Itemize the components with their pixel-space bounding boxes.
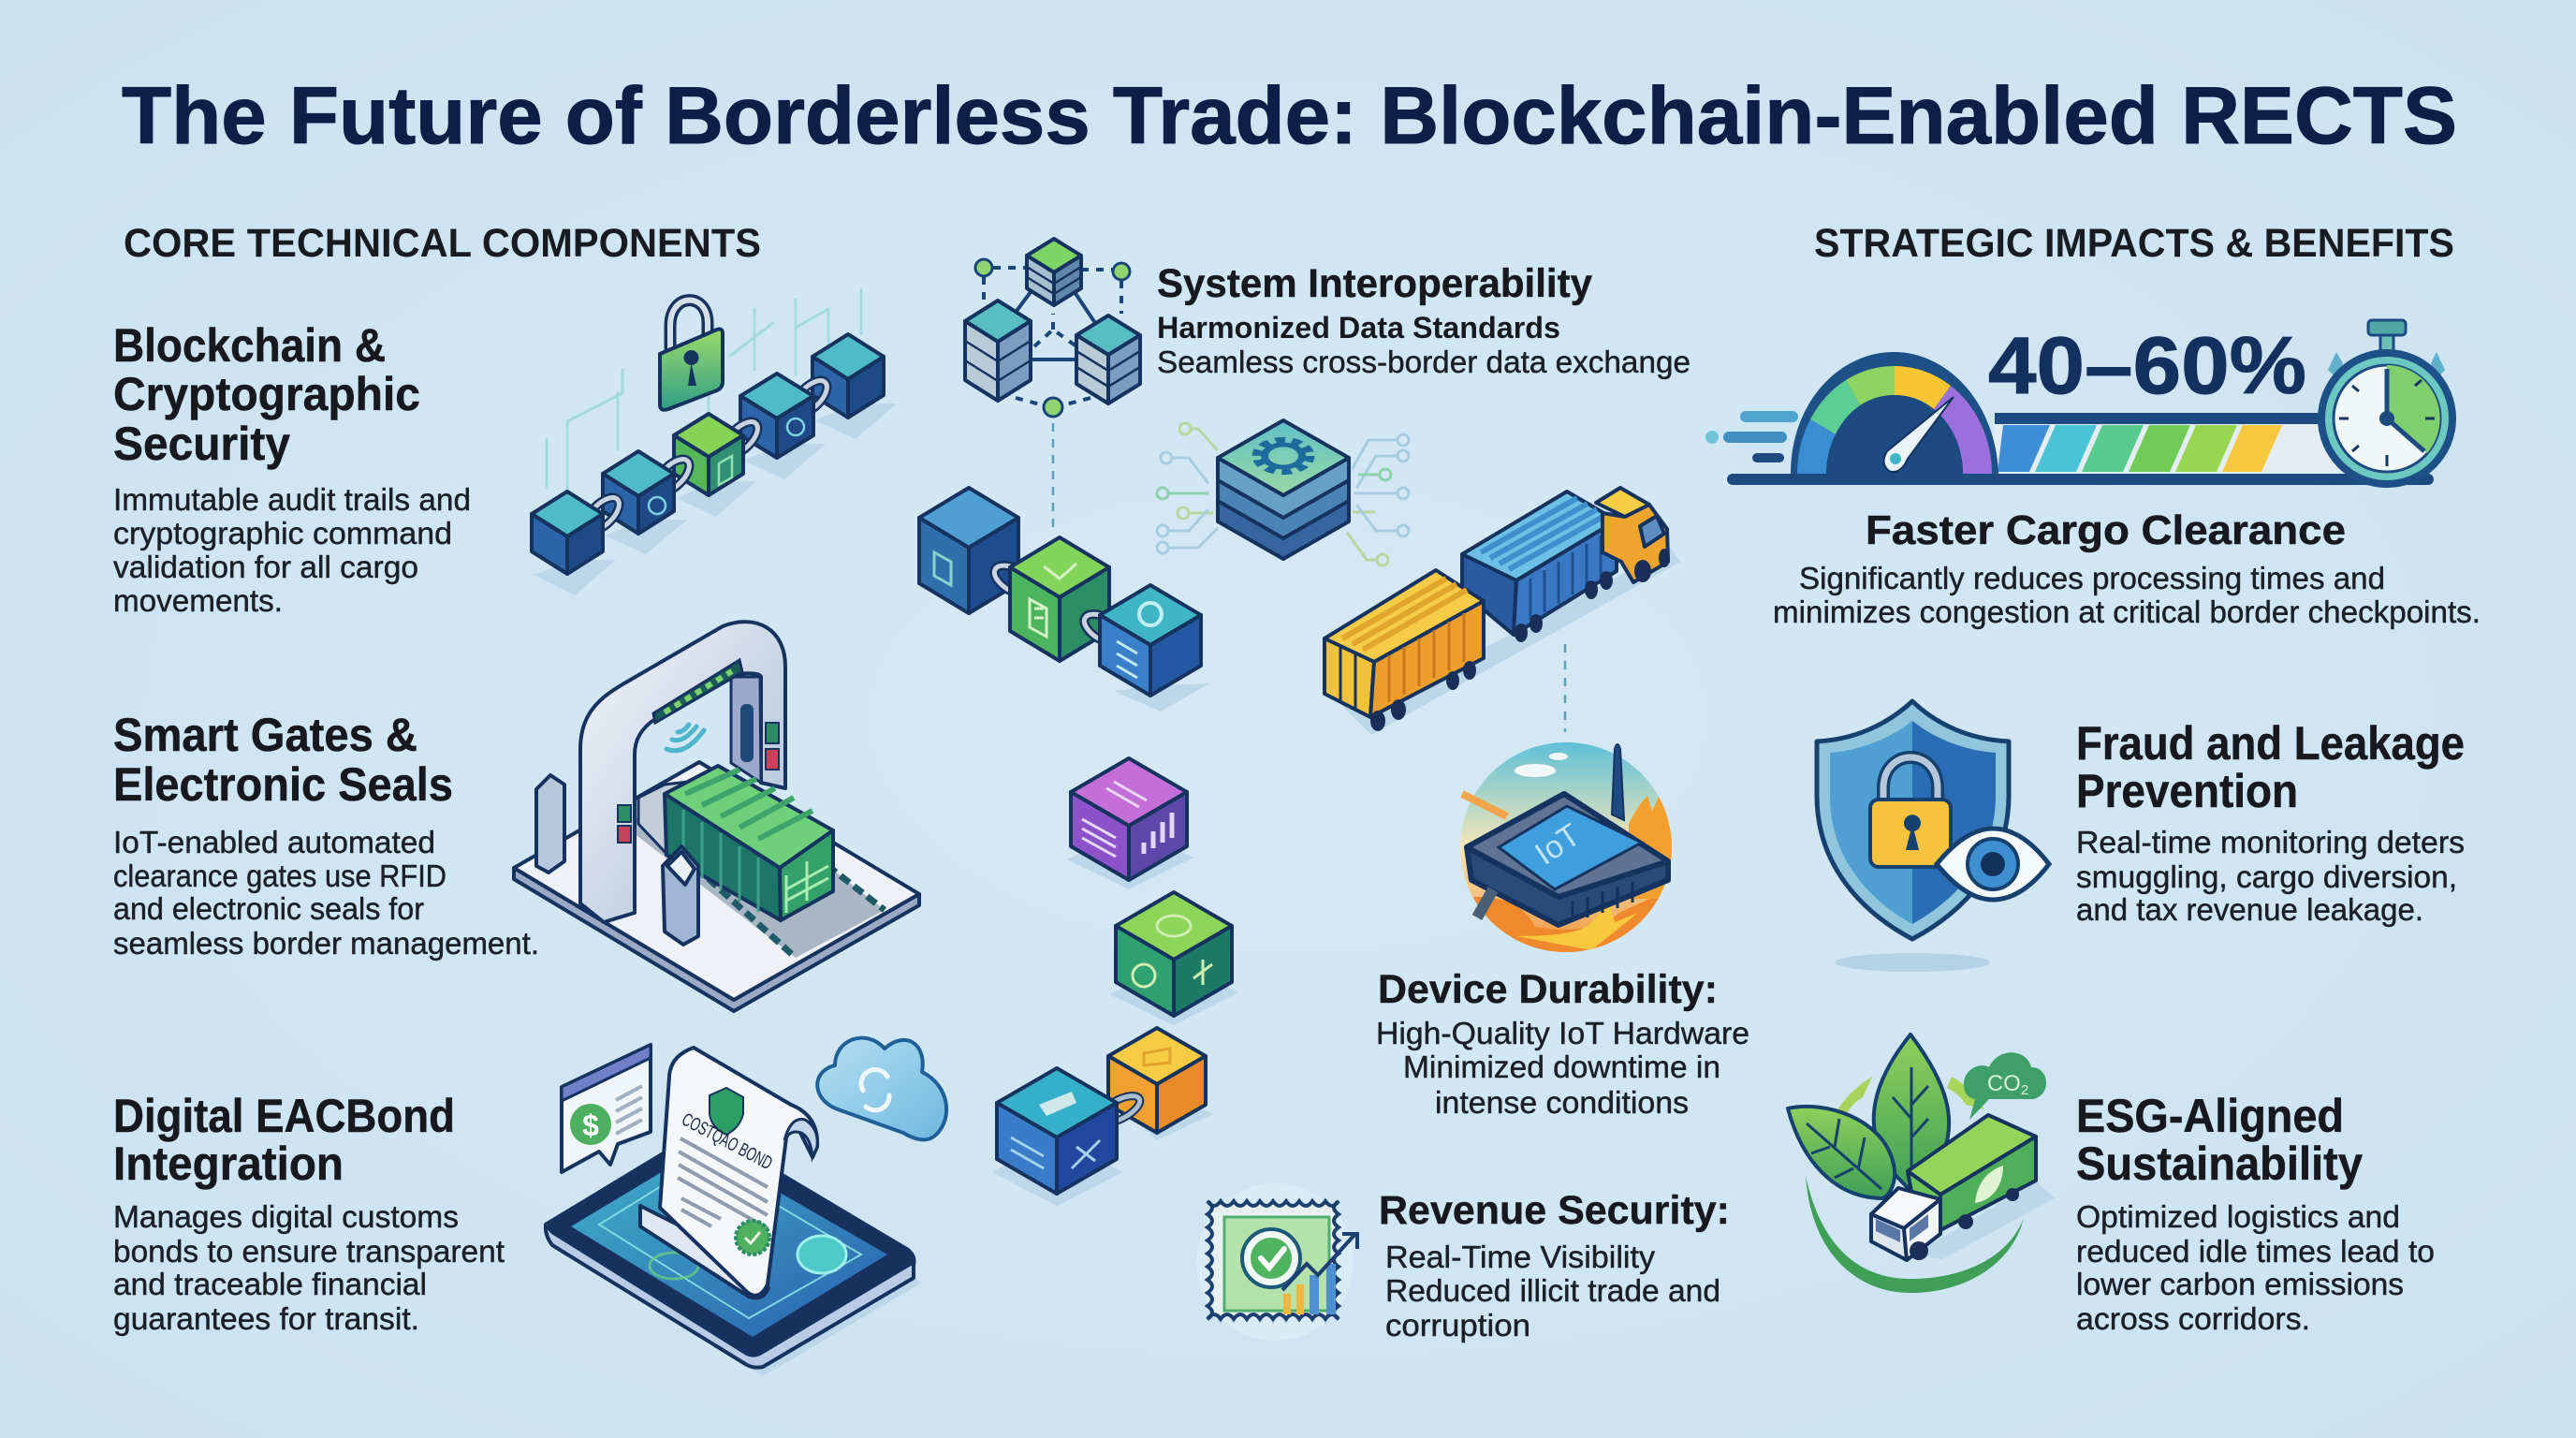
kiosk (663, 846, 698, 945)
icon: container trucks (1325, 488, 1680, 735)
body (1376, 1016, 1749, 1120)
body: blockchain (113, 482, 471, 618)
body: High-Quality IoT Hardware (1376, 1016, 1749, 1050)
text: system interoperability: Harmonized Data Standards (1157, 311, 1560, 345)
heading: blockchain (113, 319, 420, 470)
cube B (1010, 537, 1109, 661)
body: clearance gates use RFID (113, 858, 446, 893)
panel: digital eacbond text (113, 1090, 505, 1336)
body: minimizes congestion at critical border checkpoints. (1773, 594, 2481, 629)
body: Manages digital customs (113, 1199, 459, 1234)
connector: dotted line to IoT (1564, 644, 1566, 732)
icon: shield with lock and eye (1817, 701, 2049, 972)
icon: server network (965, 239, 1140, 417)
icon: leaves, green truck and CO2 cloud: CO (1987, 1071, 2021, 1096)
heading (2076, 1090, 2363, 1190)
icon: gear server stack (1157, 420, 1409, 565)
body: across corridors. (2076, 1301, 2310, 1336)
icon: data cubes column (992, 758, 1238, 1206)
gauge and progress bar with stopwatch (1705, 320, 2456, 488)
body: smuggling, cargo diversion, (2076, 859, 2457, 894)
panel: fraud and leakage prevention (1817, 701, 2465, 972)
cube 4 (740, 374, 813, 458)
text: system interoperability: System Interoperability (1157, 261, 1592, 306)
blue container truck (1462, 492, 1617, 642)
body (2076, 1199, 2435, 1336)
heading: Smart Gates & (113, 709, 417, 761)
body: seamless border management. (113, 926, 539, 961)
panel: device durability (1376, 742, 1749, 1120)
left server (965, 301, 1031, 401)
seal (736, 1221, 769, 1255)
icon: leaves, green truck and CO2 cloud: 2 (2021, 1082, 2028, 1098)
body: Minimized downtime in (1403, 1049, 1720, 1084)
heading (113, 709, 453, 811)
top server (1027, 239, 1081, 305)
green container (665, 766, 833, 920)
heading: Revenue Security: (1379, 1188, 1730, 1233)
scroll document (640, 1048, 817, 1298)
body: and electronic seals for (113, 891, 424, 926)
icon: rugged IoT device (1456, 742, 1676, 960)
linked blue and yellow cubes (992, 1028, 1213, 1206)
body: reduced idle times lead to (2076, 1234, 2435, 1269)
icon: tablet with customs bond (546, 1038, 946, 1376)
purple cube (1067, 758, 1193, 889)
heading: Digital EACBond (113, 1090, 455, 1142)
body: IoT-enabled automated (113, 825, 435, 859)
panel: revenue security (1196, 1183, 1730, 1343)
heading: Fraud and Leakage (2076, 717, 2465, 770)
body (2076, 825, 2465, 927)
heading: blockchain: Security (113, 418, 290, 470)
cube 1 (532, 492, 603, 574)
icon: revenue stamp with chart (1196, 1183, 1357, 1341)
scroll curl (784, 1119, 817, 1157)
body (113, 1199, 505, 1336)
gate panels (618, 805, 631, 822)
cloud (817, 1038, 946, 1139)
icon: leaves, green truck and CO2 cloud (1788, 1034, 2055, 1293)
green cube (1109, 892, 1238, 1025)
body (113, 825, 539, 961)
body: Reduced illicit trade and (1385, 1273, 1720, 1308)
heading: Device Durability: (1378, 967, 1718, 1012)
text: system interoperability: Seamless cross-border data exchange (1157, 345, 1690, 379)
icon: smart gate with container (514, 622, 919, 1011)
heading (2076, 717, 2465, 817)
body: Real-time monitoring deters (2076, 825, 2465, 859)
icon: rugged IoT device: IoT (1529, 817, 1587, 873)
needle (1883, 397, 1954, 472)
body: corruption (1385, 1308, 1530, 1343)
text: system interoperability (1157, 261, 1690, 379)
heading: blockchain: Cryptographic (113, 368, 420, 420)
truck cab (1596, 488, 1670, 582)
body: and traceable financial (113, 1267, 427, 1301)
body: blockchain: Immutable audit trails and (113, 482, 471, 517)
cube C (1100, 585, 1201, 696)
icon: padlock (660, 301, 723, 410)
heading: Electronic Seals (113, 758, 453, 811)
body: blockchain: movements. (113, 583, 283, 618)
document text: COSTQAO BOND (679, 1109, 776, 1174)
icon: blockchain chain with padlock (532, 290, 897, 595)
heading: Faster Cargo Clearance (1866, 507, 2346, 553)
stat: 40-60%: 40–60% (1988, 321, 2306, 411)
body: Real-Time Visibility (1385, 1240, 1656, 1274)
body: lower carbon emissions (2076, 1267, 2404, 1301)
body: blockchain: validation for all cargo (113, 550, 418, 584)
panel: esg-aligned sustainability (1788, 1034, 2435, 1336)
gate arch (580, 622, 785, 922)
shield on document (710, 1088, 743, 1135)
connector: dashed line from servers (1052, 423, 1054, 532)
wifi signal (666, 725, 704, 751)
heading: ESG-Aligned (2076, 1090, 2344, 1142)
body: and tax revenue leakage. (2076, 892, 2423, 927)
heading: Sustainability (2076, 1137, 2363, 1190)
heading: Integration (113, 1137, 344, 1190)
cube A (919, 488, 1018, 613)
bollard (536, 775, 564, 873)
cube 2 (603, 451, 674, 534)
panel: smart gates text (113, 709, 539, 961)
heading (113, 1090, 455, 1190)
body: blockchain: cryptographic command (113, 516, 452, 550)
LED display (653, 660, 742, 723)
body: Optimized logistics and (2076, 1199, 2400, 1234)
heading: core technical components: CORE TECHNICAL COMPONENTS (124, 221, 761, 266)
title: The Future of Borderless Trade: Blockchain-Enabled RECTS (122, 71, 2457, 161)
right server (1076, 315, 1140, 404)
body (1773, 561, 2481, 629)
heading: blockchain: Blockchain & (113, 319, 386, 372)
cube 3 (674, 414, 743, 495)
panel: blockchain and cryptographic security text (113, 319, 471, 618)
truck cab (1871, 1188, 1940, 1260)
payment card: $ (582, 1108, 599, 1142)
icon: three linked cubes (919, 488, 1209, 712)
stopwatch (2318, 320, 2456, 488)
payment card (562, 1045, 651, 1172)
heading: Prevention (2076, 765, 2298, 817)
body (1385, 1240, 1720, 1343)
panel: faster cargo clearance (1705, 320, 2481, 629)
cube 5 (812, 334, 884, 418)
body: Significantly reduces processing times and (1799, 561, 2385, 595)
gray truck back (638, 782, 688, 857)
heading: strategic impacts and benefits: STRATEGIC IMPACTS & BENEFITS (1814, 221, 2454, 266)
body: intense conditions (1435, 1085, 1689, 1120)
body: bonds to ensure transparent (113, 1234, 505, 1269)
yellow container (1325, 570, 1484, 731)
body: guarantees for transit. (113, 1301, 419, 1336)
